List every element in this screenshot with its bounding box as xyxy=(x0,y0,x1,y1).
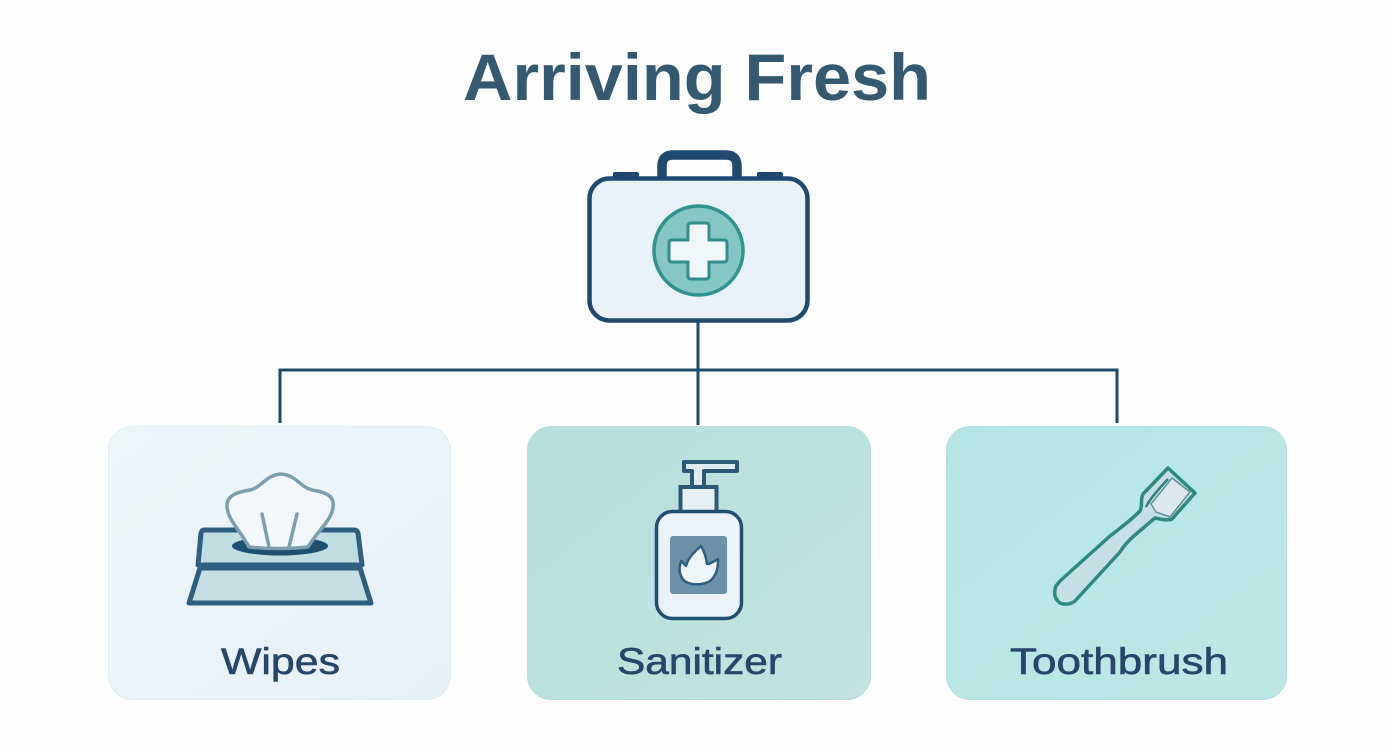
label: toothbrush: Toothbrush xyxy=(1010,641,1228,682)
panel: sanitizer xyxy=(528,426,870,700)
connector lines xyxy=(280,321,1117,425)
icon: first aid kit xyxy=(590,155,808,320)
label: wipes: Wipes xyxy=(221,641,340,682)
label: sanitizer: Sanitizer xyxy=(617,641,782,682)
icon: sanitizer bottle xyxy=(656,462,742,618)
panel: toothbrush xyxy=(946,426,1286,700)
panel: wipes xyxy=(108,426,450,700)
icon: wipes box xyxy=(189,474,371,603)
icon: toothbrush xyxy=(1055,468,1195,604)
title: Arriving Fresh xyxy=(463,40,931,114)
